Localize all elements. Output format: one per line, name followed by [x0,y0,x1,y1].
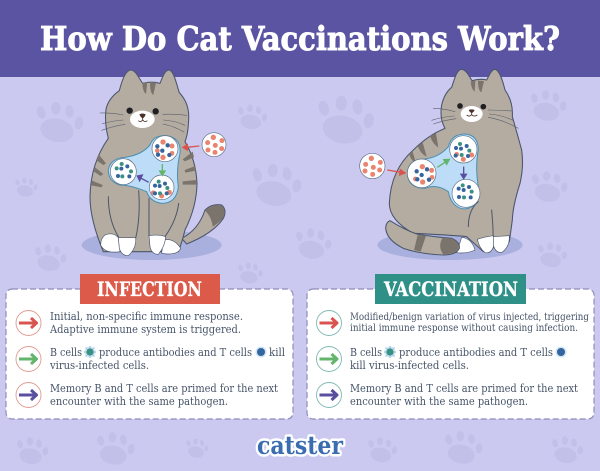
cat face [100,107,187,132]
step 2 text: produce antibodies and T cells [99,346,252,359]
illustration: vaccinated cat [360,69,523,260]
cat paws [457,236,509,253]
background paw prints [15,90,584,467]
cat body and head [389,69,523,252]
step 1 text [49,310,243,336]
step 3 arrow icon [16,382,41,408]
step 3 text: encounter with the same pathogen. [350,395,528,408]
step 2 text: kill [269,346,285,359]
step 1 arrow icon [316,310,342,336]
step 2 text: kill virus-infected cells. [350,359,469,372]
step 3 text: Memory B and T cells are primed for the next [350,382,579,395]
step 3 text [350,382,579,408]
logo: catster: catster [257,431,344,460]
heading: infection: INFECTION [97,277,202,301]
cell: infection site [152,136,178,162]
heading: vaccination: VACCINATION [383,277,518,301]
arrow: green [160,164,165,175]
panel: vaccination [307,274,594,419]
panel box [307,289,594,419]
cell: memory cells [110,159,136,185]
step 3 text: Memory B and T cells are primed for the next [50,382,279,395]
cat tail [386,221,459,255]
panel: infection [6,274,293,419]
cat tail [182,205,225,244]
cat leg lines [468,202,493,243]
arrow: red [183,145,199,150]
header band [0,0,600,77]
cat stripes [91,82,197,187]
modified virus outside [360,153,385,179]
step 1 text [350,312,589,334]
arrow: green [437,159,449,167]
step 2 arrow icon [16,346,41,372]
arrow: purple [461,167,466,179]
step 1 text: Initial, non-specific immune response. [50,310,243,323]
heading: vaccination [375,274,526,304]
step 3 text: encounter with the same pathogen. [50,395,228,408]
step 2 text [350,346,566,372]
cat face [432,103,518,128]
cat leg lines [108,191,179,238]
cell: injection site [407,159,436,188]
step 1 text: Adaptive immune system is triggered. [49,323,241,336]
step 2 text: B cells [50,346,82,359]
cat shadow [82,230,222,260]
heading: infection [80,274,220,304]
cat shadow [377,230,523,260]
step 2 text [49,346,285,372]
cell: memory cells [452,179,480,207]
cat stripes [409,81,484,163]
step 2 arrow icon [316,346,342,372]
cell: B and T response [149,175,174,200]
lymph system blob [108,136,180,203]
step 2 text: B cells [350,346,382,359]
cat paws [101,234,181,256]
step 1 text: initial immune response without causing infection. [350,323,578,334]
step 2 text: virus-infected cells. [49,359,149,372]
step 3 arrow icon [316,382,342,408]
lymph system blob [407,134,479,209]
step 2 text: produce antibodies and T cells [399,346,553,359]
step 3 text [50,382,279,408]
cat body and head [90,70,197,252]
panel box [6,289,293,419]
arrow: red [387,170,405,175]
illustration: infected cat [82,70,226,260]
step 1 arrow icon [16,310,41,336]
virus particles outside [202,133,226,157]
arrow: purple [137,175,149,182]
cell: B and T response [450,136,477,163]
